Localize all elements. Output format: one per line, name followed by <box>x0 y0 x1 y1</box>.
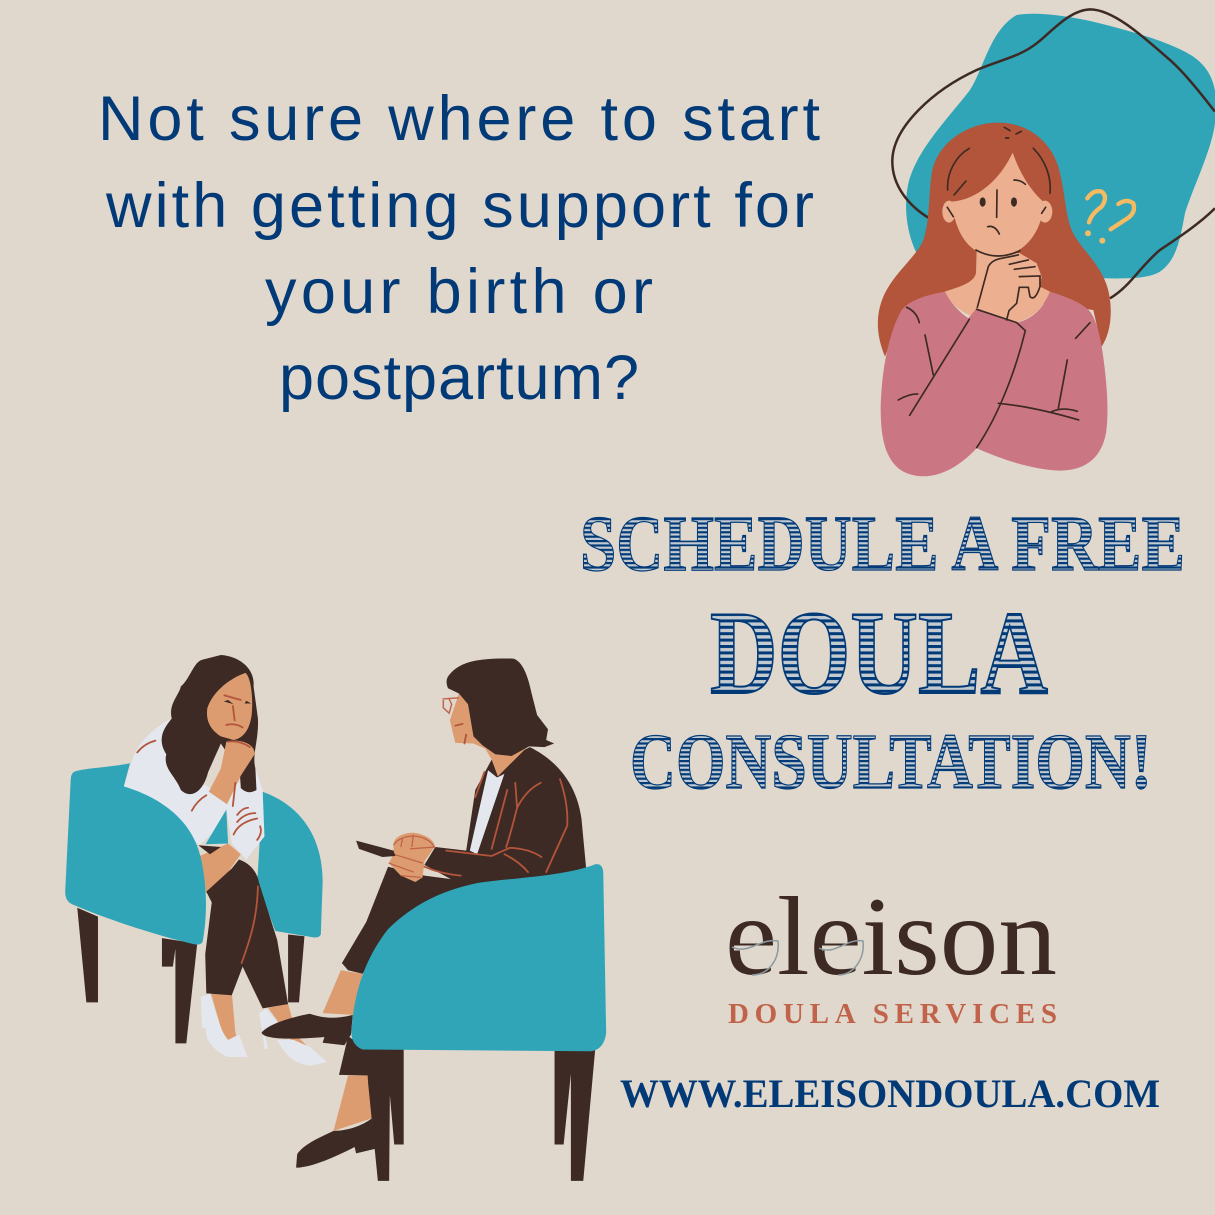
logo wave lines <box>732 941 863 975</box>
shoes <box>262 1014 353 1045</box>
clothing accent lines <box>137 695 261 963</box>
jacket <box>424 747 586 886</box>
logo tagline: DOULA SERVICES <box>728 998 1057 1030</box>
eyes <box>980 197 1017 207</box>
sweater <box>881 292 1107 476</box>
hair <box>878 123 1111 357</box>
left chair front <box>65 763 206 945</box>
neckline skin <box>484 746 528 776</box>
website url: WWW.ELEISONDOULA.COM <box>620 1071 1160 1116</box>
face <box>207 673 252 740</box>
counsellor figure <box>262 658 586 1168</box>
skin: face, ears, neck, hand <box>942 153 1052 323</box>
arm and hand <box>209 741 255 804</box>
hands <box>389 833 435 882</box>
client figure <box>124 655 327 1066</box>
illustration: doula consultation <box>65 655 606 1181</box>
outline curve <box>892 9 1215 298</box>
heading: question: with getting support for <box>105 171 814 241</box>
teal blob <box>906 14 1215 278</box>
trousers <box>198 845 288 1008</box>
left chair back and legs <box>77 908 304 1043</box>
hair <box>162 655 258 794</box>
blouse <box>124 719 264 860</box>
jacket accent lines <box>424 724 567 876</box>
question marks <box>1087 191 1134 229</box>
clipboard <box>356 841 395 857</box>
logo wordmark: eleison <box>725 875 1057 999</box>
blouse <box>470 770 504 854</box>
heading: question: postpartum? <box>279 343 639 413</box>
hair <box>447 658 554 756</box>
skin: face and legs <box>450 694 523 761</box>
right chair legs <box>366 1049 595 1181</box>
trousers <box>342 867 479 974</box>
headline: schedule a free doula consultation: DOULA <box>710 586 1048 719</box>
heels <box>201 993 247 1057</box>
heading: question: Not sure where to start <box>98 84 820 154</box>
headline: schedule a free doula consultation <box>580 501 1185 806</box>
heading: question: your birth or <box>265 257 653 327</box>
line details <box>898 127 1090 448</box>
illustration: thinking woman <box>878 9 1215 476</box>
glasses <box>443 698 459 713</box>
heading: question <box>98 84 820 413</box>
right chair front <box>351 864 606 1051</box>
logo: eleison doula services <box>725 875 1057 1030</box>
